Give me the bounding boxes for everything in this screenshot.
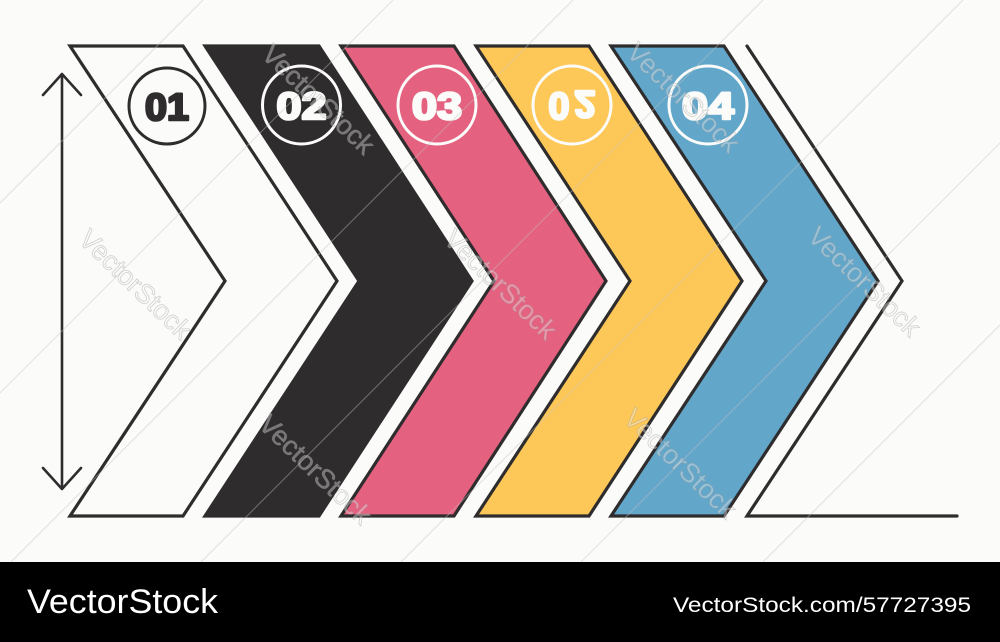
watermark text: VectorStock [802, 221, 927, 343]
watermark text: VectorStock [438, 224, 563, 346]
watermark text: VectorStock [73, 224, 198, 346]
badge 03 with flipped digit [533, 66, 611, 144]
badge 01: 01 [145, 87, 189, 129]
chevron 4: yellow [476, 46, 742, 516]
badge 04 [669, 66, 747, 144]
badge 02 [262, 66, 340, 144]
chevron 2: black [205, 46, 472, 516]
double-headed height arrow [43, 74, 81, 489]
watermark text: VectorStock [253, 409, 378, 531]
watermark text: VectorStock [256, 39, 381, 161]
badge 04: 04 [682, 86, 734, 128]
badge 03: 03 [412, 86, 462, 128]
badge 01 [129, 68, 205, 144]
badge 03 [398, 66, 476, 144]
chevron 5: blue [611, 46, 878, 516]
footer bar [0, 562, 1000, 642]
badge 03 with flipped digit: 0 [548, 86, 570, 128]
badge 03 with flipped digit: 2 [574, 82, 596, 124]
footer image id: VectorStock.com/57727395 [673, 593, 971, 617]
watermark text: VectorStock [621, 37, 746, 159]
chevron 1: outline white [70, 46, 337, 516]
open chevron outline at right [747, 46, 957, 516]
footer logo text: VectorStock [27, 583, 219, 621]
badge 02: 02 [276, 86, 326, 128]
watermark text [73, 37, 927, 531]
chevron 3: pink [341, 46, 606, 516]
watermark text: VectorStock [618, 403, 743, 525]
